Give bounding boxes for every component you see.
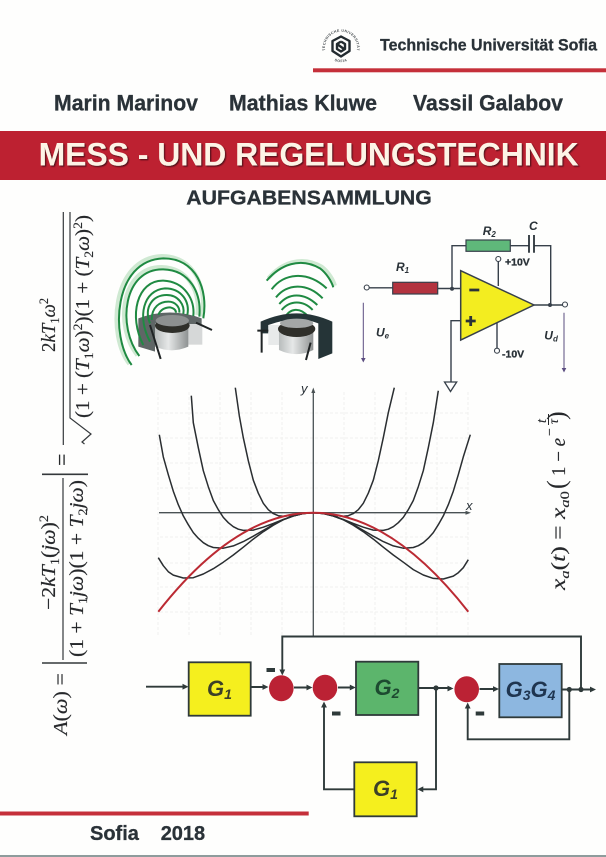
place and year: Sofia [90, 823, 140, 845]
black curves [158, 388, 470, 579]
block G3G4: 4 [547, 687, 556, 703]
authors: Mathias Kluwe [229, 91, 377, 116]
formula: step response: a [557, 499, 572, 508]
formula: amplitude response: ) [66, 481, 88, 487]
formula: step response: 0 [557, 491, 572, 499]
ground symbol [444, 382, 457, 392]
formula: amplitude response: ω [38, 304, 60, 317]
block G3G4: G [530, 677, 548, 702]
formula: amplitude response: ω [72, 337, 94, 352]
formula: amplitude response: 1 [81, 352, 96, 359]
block G1 lower: 1 [390, 786, 398, 802]
formula: step response: a [557, 570, 572, 579]
block G2 [356, 662, 418, 715]
arrowheads [182, 670, 596, 792]
formula: amplitude response: )(1 + ( [72, 269, 94, 324]
title banner: MESS - UND REGELUNGSTECHNIK [39, 137, 579, 173]
red parabola [158, 513, 468, 612]
circuit labels: R [396, 260, 405, 274]
voltage arrows [363, 303, 564, 369]
formula: step response: t [535, 418, 550, 423]
university logo: TECHNISCHE UNIVERSITÄT [322, 29, 360, 51]
formula: amplitude response: 2kT [38, 323, 60, 352]
formula: amplitude response: 2 [36, 515, 51, 522]
formula: amplitude response: ) [72, 331, 94, 337]
function graph [158, 381, 473, 637]
title banner [0, 131, 606, 180]
formula: amplitude response: −2kT [38, 567, 60, 610]
formula: step response: ( [542, 480, 571, 489]
authors: Vassil Galabov [413, 91, 564, 116]
summing junctions [269, 675, 479, 702]
formula: amplitude response: jω) [38, 523, 60, 551]
formula: step response: t) = x [548, 510, 570, 562]
formula: step response: τ [547, 418, 562, 424]
block G1 lower: G [373, 776, 390, 801]
place and year: 2018 [161, 823, 205, 845]
formula: step response: ) [542, 411, 571, 420]
formula: amplitude response: ) [72, 215, 94, 222]
block G2: G [375, 675, 392, 700]
formula: amplitude response: 2 [81, 251, 96, 258]
formula: amplitude response: = [49, 454, 74, 466]
formula: amplitude response: ) [72, 229, 94, 236]
formula: amplitude response: ( [38, 550, 60, 558]
formula: amplitude response [36, 212, 96, 737]
circuit labels: 2 [490, 230, 496, 239]
formula: amplitude response: (1 + T [66, 605, 88, 657]
bottom red rule [0, 812, 309, 816]
axes [159, 390, 468, 637]
page edge [0, 855, 606, 857]
formula: amplitude response: T [72, 256, 94, 269]
block G3G4 [499, 664, 562, 717]
top red rule [313, 68, 606, 72]
formula: amplitude response: (1 + (T [72, 360, 94, 418]
formula: amplitude response: 2 [70, 324, 85, 330]
amplifier triangle [461, 271, 534, 340]
circuit labels: C [529, 219, 538, 233]
block G3G4: G [506, 677, 523, 702]
circuit labels: U [544, 328, 553, 342]
circuit labels: d [553, 334, 559, 343]
resistor R1 [393, 282, 438, 294]
block G1 upper: 1 [224, 686, 232, 702]
op-amp circuit [361, 219, 568, 392]
formula: amplitude response: 1 [47, 558, 62, 565]
function graph: x [465, 498, 473, 513]
formula: amplitude response: 2 [70, 222, 85, 229]
formula: amplitude response: A(ω) = [50, 673, 72, 737]
formula: step response [535, 411, 572, 591]
formula: amplitude response: 1 [75, 597, 90, 604]
block G3G4: 3 [523, 687, 531, 703]
formula: step response: x [548, 578, 570, 591]
circuit labels: 1 [405, 266, 410, 275]
university name: Technische Universität Sofia [380, 37, 598, 55]
formula: step response: 1 − e [548, 438, 570, 476]
function graph: y [300, 381, 309, 396]
formula: amplitude response: 2 [36, 298, 51, 304]
university logo [322, 29, 360, 62]
capacitor C [529, 235, 534, 253]
formula: amplitude response: jω [66, 576, 88, 600]
circuit labels: U [376, 326, 385, 340]
block G1 upper [189, 662, 251, 716]
subtitle: AUFGABENSAMMLUNG [186, 186, 432, 209]
university logo: SOFIA [334, 58, 347, 62]
place and year [90, 823, 205, 845]
block diagram [146, 636, 596, 816]
formula: step response: − [543, 428, 558, 436]
icon: coil with wide field [116, 256, 212, 365]
authors: Marin Marinov [54, 91, 199, 116]
block G2: 2 [391, 685, 400, 701]
resistor R2 [466, 240, 510, 251]
icon: coil with shielded field [257, 261, 335, 360]
circuit labels: R [483, 224, 491, 238]
block G1 upper: G [207, 676, 224, 701]
circuit labels [376, 219, 559, 361]
formula: amplitude response: jω [66, 487, 88, 512]
terminals and junctions [364, 256, 568, 353]
junction dots [433, 685, 584, 692]
circuit labels: -10V [502, 349, 524, 361]
minus signs [266, 668, 484, 716]
block G1 lower [354, 762, 417, 816]
circuit labels: e [385, 332, 390, 341]
formula: amplitude response: 2 [75, 508, 90, 515]
formula: amplitude response: ω [72, 236, 94, 251]
signal lines [146, 636, 592, 789]
minus and plus inputs [466, 290, 479, 326]
authors [54, 91, 564, 116]
formula: amplitude response: )(1 + T [66, 516, 88, 576]
formula: amplitude response: 1 [47, 317, 62, 324]
circuit labels: +10V [505, 257, 530, 269]
formula: step response: ( [548, 561, 570, 570]
